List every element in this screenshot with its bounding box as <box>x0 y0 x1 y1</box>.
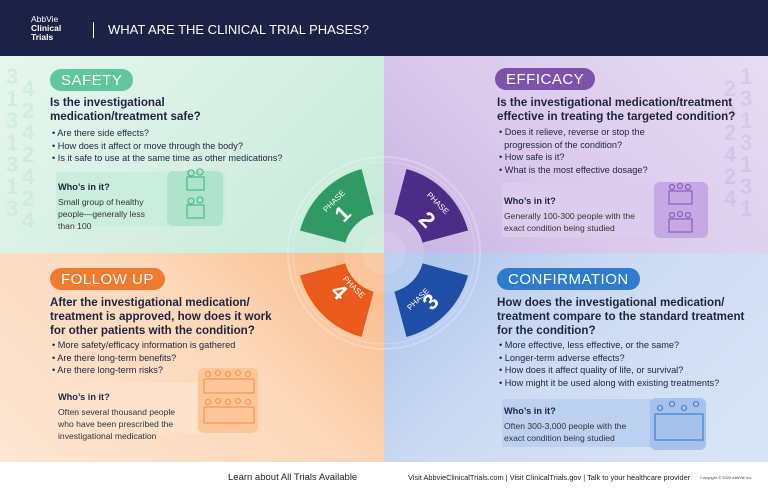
segment: phase 1 <box>300 169 374 243</box>
panel: efficacy: 2 <box>724 120 736 145</box>
number pattern <box>6 64 18 221</box>
number pattern: 3 <box>740 130 752 155</box>
pill: efficacy: EFFICACY <box>506 71 584 88</box>
who's in it band <box>502 183 556 237</box>
panel: safety: 4 <box>22 164 34 189</box>
panel: efficacy: 2 <box>724 76 736 101</box>
segment: phase 3: 3 <box>418 289 444 315</box>
segment: phase 4: 4 <box>326 279 353 305</box>
logo: Trials <box>31 32 53 42</box>
bullets: • How might it be used along with existing treatments? <box>499 378 719 388</box>
segment: phase 3 <box>394 263 468 337</box>
who's in it: who have been prescribed the <box>58 419 173 429</box>
question: medication/treatment safe? <box>50 110 201 123</box>
segment: phase 1: PHASE <box>321 188 347 214</box>
panel: confirmation <box>384 253 768 462</box>
question: treatment compare to the standard treatment <box>497 310 744 323</box>
who's in it <box>58 182 145 231</box>
question: Is the investigational medication/treatment <box>497 96 732 109</box>
bullets: • More safety/efficacy information is gathered <box>52 340 235 350</box>
segment: phase 2: 2 <box>414 207 440 233</box>
panel: safety: 4 <box>22 76 34 101</box>
who's in it: Often 300-3,000 people with the <box>504 421 626 431</box>
bullets: • Are there long-term risks? <box>52 365 163 375</box>
panel: efficacy: 4 <box>724 98 736 123</box>
question: treatment is approved, how does it work <box>50 310 272 323</box>
who's in it <box>504 406 626 443</box>
number pattern: 1 <box>6 130 18 155</box>
bullets <box>499 340 719 388</box>
who's in it: Small group of healthy <box>58 197 144 207</box>
segment: phase 2: PHASE <box>425 190 451 216</box>
bullets: • How does it affect quality of life, or survival? <box>499 365 683 375</box>
number pattern: 3 <box>6 152 18 177</box>
who's in it band <box>56 172 226 226</box>
bullets <box>52 340 235 375</box>
who's in it <box>504 196 635 233</box>
question <box>497 296 744 337</box>
number pattern: 3 <box>740 174 752 199</box>
question <box>50 96 201 123</box>
panel: efficacy: 4 <box>724 186 736 211</box>
bullets: • What is the most effective dosage? <box>499 165 648 175</box>
pill: confirmation <box>497 268 640 290</box>
bullets: progression of the condition? <box>504 140 622 150</box>
panel: efficacy <box>384 56 768 253</box>
panel: safety: 2 <box>22 142 34 167</box>
footer <box>0 462 768 497</box>
question <box>50 296 272 337</box>
question: effective in treating the targeted condition? <box>497 110 735 123</box>
logo: AbbVie <box>31 14 58 24</box>
logo: Clinical <box>31 23 61 33</box>
pill: follow up: FOLLOW UP <box>61 271 154 288</box>
bullets: • Is it safe to use at the same time as other medications? <box>52 153 282 163</box>
bullets <box>52 128 282 163</box>
logo <box>31 14 61 42</box>
who's in it: Generally 100-300 people with the <box>504 211 635 221</box>
bullets: • Longer-term adverse effects? <box>499 353 625 363</box>
question: Is the investigational <box>50 96 165 109</box>
segment: phase 4 <box>300 263 374 337</box>
number pattern: 3 <box>740 86 752 111</box>
number pattern: 3 <box>6 64 18 89</box>
segment: phase 2 <box>394 169 468 243</box>
pill: efficacy <box>495 68 595 90</box>
who's in it: Who’s in it? <box>504 196 556 206</box>
bullets <box>499 127 648 175</box>
number pattern: 3 <box>6 196 18 221</box>
who's in it <box>58 392 175 441</box>
footer info: Visit AbbvieClinicalTrials.com | Visit ClinicalTrials.gov | Talk to your healthcare provider <box>408 473 690 482</box>
who's in it: Who’s in it? <box>504 406 556 416</box>
number pattern: 1 <box>740 108 752 133</box>
copyright: Copyright © 2020 AbbVie Inc. <box>700 475 752 480</box>
who's in it: Often several thousand people <box>58 407 175 417</box>
who's in it: Who’s in it? <box>58 392 110 402</box>
who's in it band <box>120 383 256 433</box>
icon: people <box>668 182 693 233</box>
who's in it box <box>654 182 708 238</box>
bullets: • How does it affect or move through the body? <box>52 141 243 151</box>
segment: phase 4: PHASE <box>341 274 367 300</box>
number pattern: 1 <box>6 174 18 199</box>
number pattern: 1 <box>6 86 18 111</box>
panel: efficacy: 2 <box>724 164 736 189</box>
who's in it: investigational medication <box>58 431 156 441</box>
panel: safety: 2 <box>22 186 34 211</box>
pill: safety: SAFETY <box>61 72 122 89</box>
who's in it: exact condition being studied <box>504 223 615 233</box>
bullets: • Are there long-term benefits? <box>52 353 176 363</box>
pill: follow up <box>50 268 165 290</box>
number pattern: 3 <box>6 108 18 133</box>
segment: phase 1: 1 <box>330 201 356 227</box>
who's in it: people—generally less <box>58 209 145 219</box>
footer link: Learn about All Trials Available <box>228 472 357 483</box>
number pattern: 1 <box>740 64 752 89</box>
question: for the condition? <box>497 324 596 337</box>
segment: phase 3: PHASE <box>405 286 431 312</box>
who's in it box <box>198 368 258 433</box>
bullets: • More effective, less effective, or the same? <box>499 340 679 350</box>
panel: safety: 4 <box>22 120 34 145</box>
who's in it box <box>650 398 706 450</box>
number pattern: 1 <box>740 196 752 221</box>
who's in it: exact condition being studied <box>504 433 615 443</box>
question <box>497 96 735 123</box>
wheel: phases <box>287 156 481 350</box>
who's in it: than 100 <box>58 221 91 231</box>
panel: safety: 2 <box>22 98 34 123</box>
question: How does the investigational medication/ <box>497 296 724 309</box>
bullets: • How safe is it? <box>499 152 565 162</box>
question: After the investigational medication/ <box>50 296 250 309</box>
number pattern <box>740 64 752 221</box>
who's in it box <box>167 171 223 226</box>
bullets: • Are there side effects? <box>52 128 149 138</box>
pill: confirmation: CONFIRMATION <box>508 271 629 288</box>
question: for other patients with the condition? <box>50 324 255 337</box>
title: WHAT ARE THE CLINICAL TRIAL PHASES? <box>108 22 369 37</box>
who's in it: Who’s in it? <box>58 182 110 192</box>
icon: crowd <box>203 370 254 424</box>
panel: follow up <box>0 253 384 462</box>
icon: crowd <box>654 401 704 441</box>
panel: safety <box>0 56 384 253</box>
number pattern: 1 <box>740 152 752 177</box>
header <box>0 0 768 56</box>
who's in it band <box>502 399 652 447</box>
panel: efficacy: 4 <box>724 142 736 167</box>
pill: safety <box>50 69 133 91</box>
bullets: • Does it relieve, reverse or stop the <box>499 127 645 137</box>
panel: safety: 4 <box>22 208 34 233</box>
icon: people <box>186 168 205 219</box>
